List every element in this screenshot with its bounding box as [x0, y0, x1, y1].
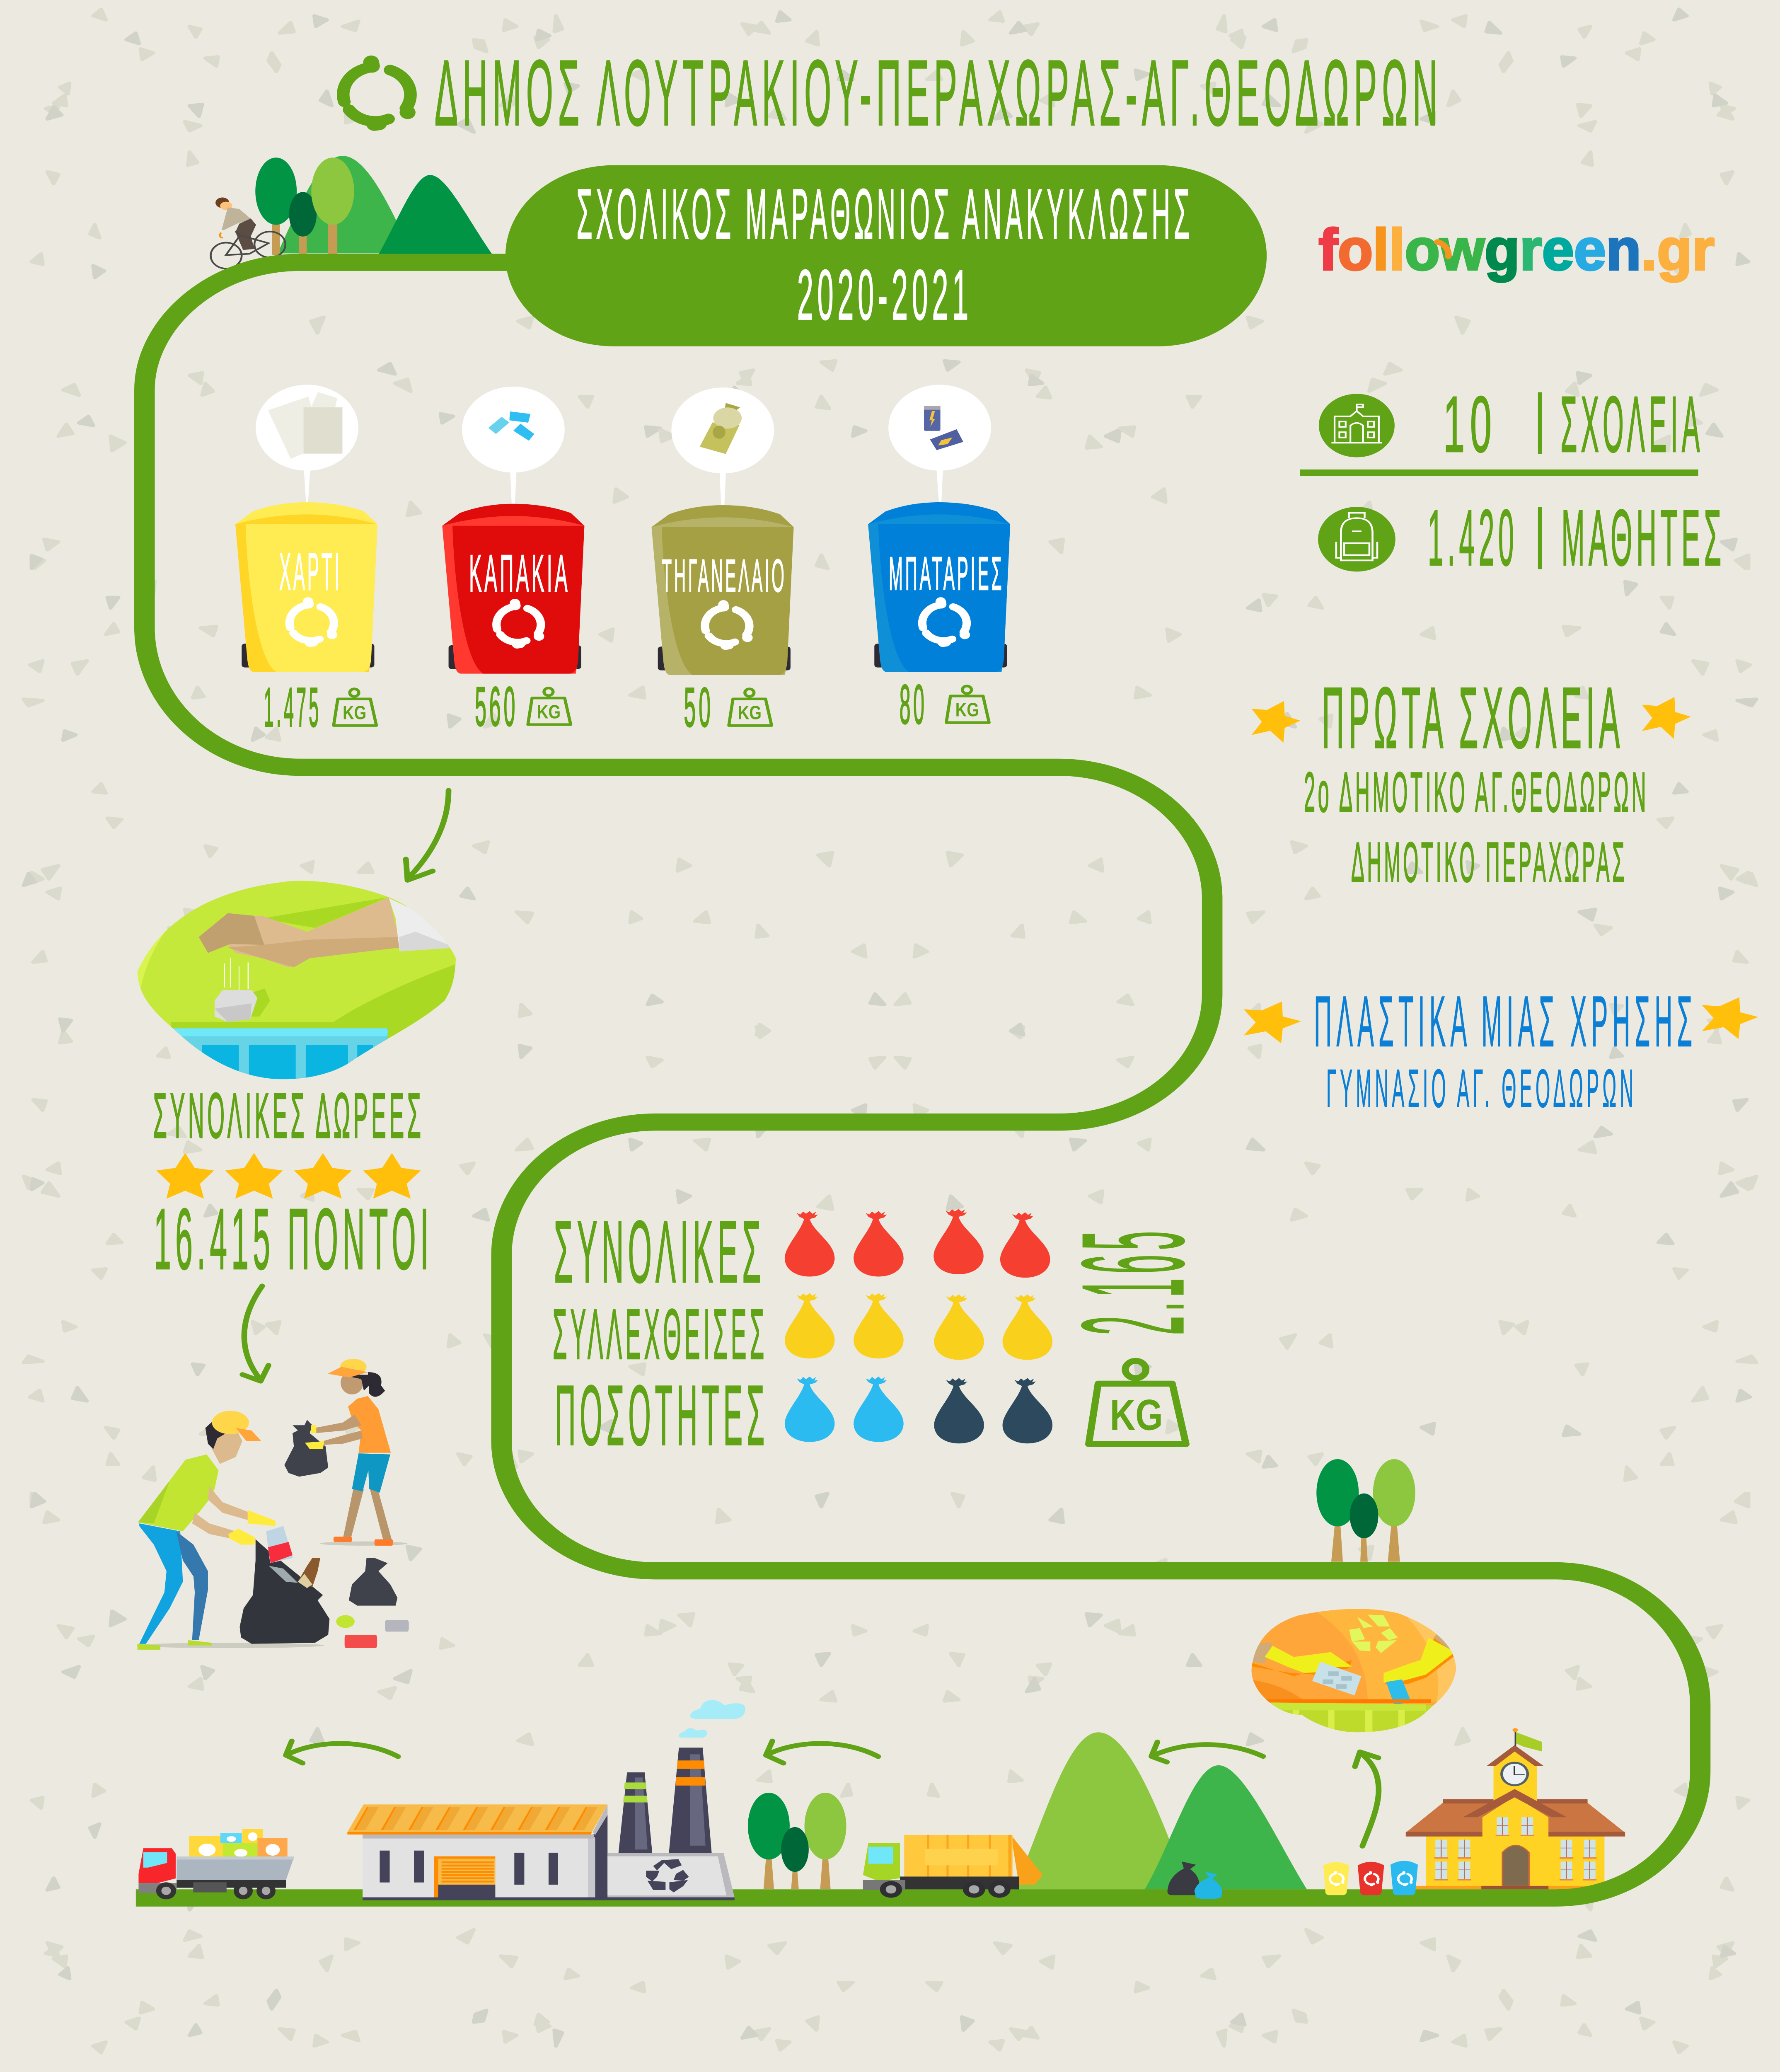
header pill: 2020-2021 [797, 255, 972, 334]
illustration: hand dropping paper [138, 881, 456, 1079]
arrow: factory to products [286, 1741, 398, 1763]
illustration: garbage truck, bags, small bins [863, 1835, 1418, 1899]
illustration: factory and truck [138, 1700, 846, 1900]
factory building [347, 1748, 735, 1900]
illustration: school building [1406, 1728, 1625, 1889]
panel: total collected quantities: ΠΟΣΟΤΗΤΕΣ [555, 1368, 769, 1463]
bin: batteries: KG [955, 699, 979, 721]
arrow: points to volunteers [242, 1286, 268, 1381]
stat: schools: 10 [1443, 380, 1497, 469]
panel: total collected quantities: ΣΥΛΛΕΧΘΕΙΣΕΣ [553, 1295, 767, 1374]
icon: star left [1243, 1002, 1301, 1043]
icon: four stars [156, 1153, 421, 1199]
bin: batteries: 80 [900, 673, 927, 736]
bags at roadside [1167, 1861, 1222, 1899]
panel: total donations [153, 1080, 433, 1287]
panel: bins [235, 385, 1010, 738]
icon: kg weight: KG [1110, 1390, 1163, 1439]
icon: school [1319, 394, 1395, 457]
panel: total collected quantities: ΣΥΝΟΛΙΚΕΣ [554, 1203, 765, 1301]
panel: total collected quantities [553, 1203, 1214, 1463]
bin: caps: 560 [475, 675, 518, 738]
bin: paper [235, 385, 377, 738]
text: ΣΥΝΟΛΙΚΕΣ ΔΩΡΕΕΣ [153, 1080, 424, 1152]
recycling truck [138, 1829, 294, 1899]
panel: bins: ΚΑΠΑΚΙΑ [469, 544, 570, 603]
trees at factory [748, 1793, 846, 1889]
illustration: volunteers collecting litter [137, 1359, 409, 1650]
illustration: hills and trees top [215, 156, 492, 255]
panel: bins: ΤΗΓΑΝΕΛΑΙΟ [662, 550, 786, 602]
icon: star right [1642, 697, 1691, 739]
woman [284, 1359, 393, 1546]
logo: followgreen.gr: followgreen.gr [1319, 217, 1715, 282]
icon: backpack [1318, 507, 1395, 571]
title [343, 41, 1442, 145]
garbage truck [863, 1835, 1043, 1898]
arrow: sorting to truck [1151, 1742, 1263, 1762]
icon: star right [1702, 997, 1758, 1039]
panel: stats schools and students [1300, 380, 1725, 582]
man [138, 1411, 329, 1650]
bin: batteries [868, 385, 1010, 736]
bin: paper: 1.475 [264, 676, 321, 738]
text: ΜΠΑΤΑΡΙΕΣ [889, 547, 1004, 600]
illustration: hill, trees, school [1013, 1459, 1625, 1889]
icon: cyclist bicycle [211, 231, 285, 269]
illustration: trees on path [1316, 1459, 1415, 1562]
icon: star left [1252, 701, 1301, 743]
icon: kg weight [1089, 1361, 1186, 1444]
arrow: bins to donation [406, 790, 449, 880]
small recycling bins [1323, 1861, 1418, 1895]
bin: cooking oil: 50 [684, 676, 713, 738]
header pill [505, 165, 1267, 346]
stat: schools: | [1533, 381, 1546, 455]
stat: students: | [1533, 496, 1546, 569]
panel: first schools [1252, 669, 1691, 893]
arrow: truck to factory [766, 1741, 878, 1763]
illustration: hands sorting recycling [1246, 1606, 1463, 1734]
bin: paper: KG [343, 702, 366, 724]
bin: cooking oil [651, 387, 793, 738]
bin: cooking oil: KG [738, 702, 762, 724]
icon: rows of garbage bags [785, 1209, 1052, 1443]
smoke clouds [679, 1700, 745, 1738]
litter on ground [336, 1558, 409, 1648]
bin: caps: KG [537, 701, 561, 722]
panel: single-use plastics [1243, 981, 1758, 1119]
stat: schools [1443, 380, 1704, 469]
winding green path [136, 262, 1700, 1898]
stat: students: 1.420 [1428, 493, 1518, 582]
icon: recycling logo [343, 62, 411, 124]
text: 16.415 ΠΟΝΤΟΙ [154, 1191, 433, 1287]
text: 2.165 [1052, 1227, 1214, 1335]
arrow: school to sorting [1355, 1752, 1379, 1846]
panel: bins: ΧΑΡΤΙ [279, 542, 342, 601]
bin: caps [442, 387, 584, 738]
illustration: two green mountains [1013, 1732, 1307, 1889]
